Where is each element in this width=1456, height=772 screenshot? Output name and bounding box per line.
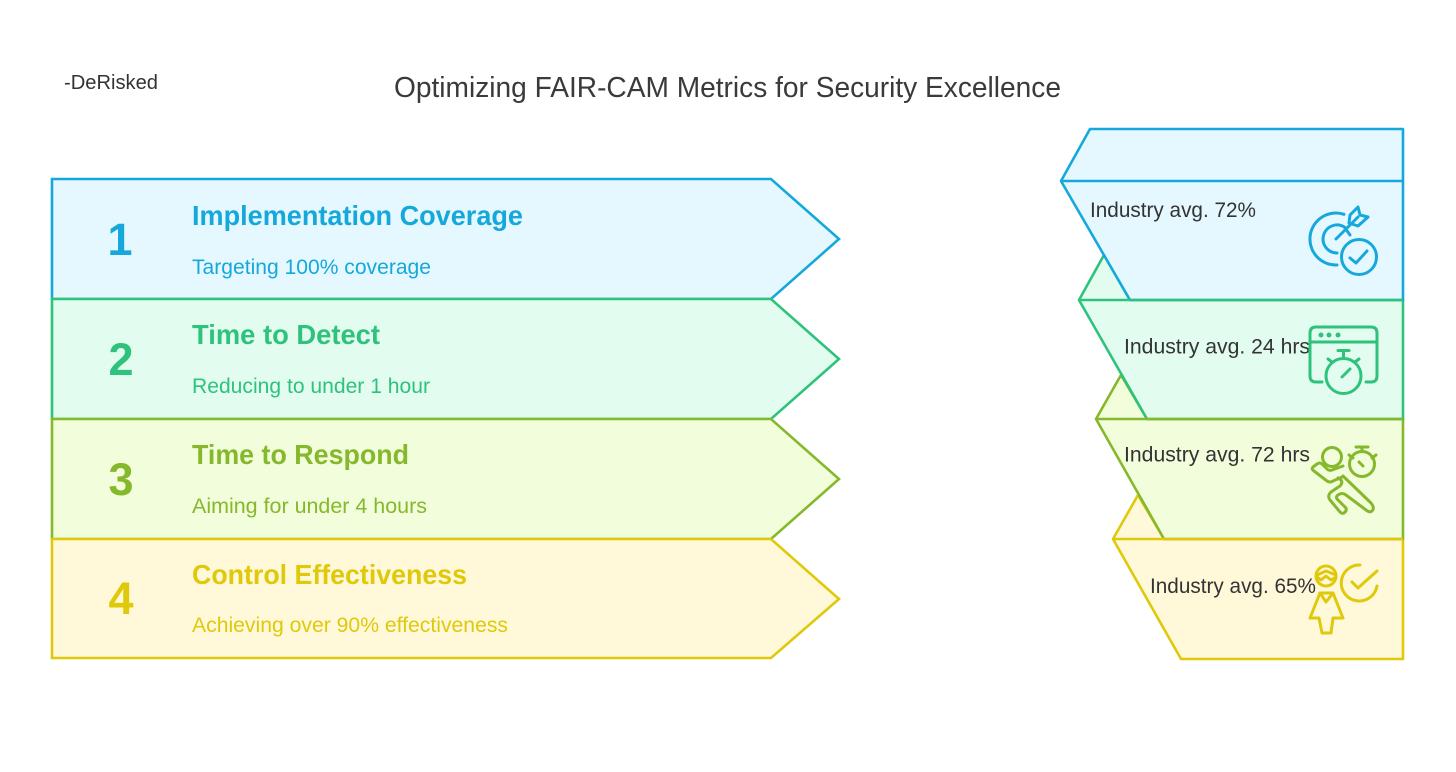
icon: target with check	[1310, 207, 1376, 274]
target text: Aiming for under 4 hours	[192, 494, 427, 518]
icon: person with check	[1310, 565, 1377, 633]
number 4: 4	[108, 573, 134, 624]
panel: industry benchmark 2	[1079, 255, 1403, 419]
target text: Reducing to under 1 hour	[192, 374, 430, 398]
panel: metric 3 time to respond arrow	[52, 419, 839, 539]
panel: industry benchmark 4	[1113, 495, 1403, 659]
benchmark text: 24 hrs: Industry avg. 24 hrs	[1124, 336, 1310, 358]
icon: runner with stopwatch	[1312, 447, 1376, 513]
number 2: 2	[108, 334, 134, 385]
number 3: 3	[108, 454, 134, 505]
panel: industry benchmark 1	[1061, 129, 1403, 300]
icon: browser window with stopwatch	[1310, 327, 1377, 394]
title: Optimizing FAIR-CAM Metrics for Security Excellence	[394, 72, 1061, 104]
target text: Achieving over 90% effectiveness	[192, 613, 508, 637]
heading: time to detect: Time to Detect	[192, 319, 380, 350]
number 1: 1	[107, 214, 133, 265]
benchmark text: 72%: Industry avg. 72%	[1090, 199, 1256, 222]
heading: control effectiveness: Control Effectiveness	[192, 559, 467, 590]
heading: implementation coverage: Implementation Coverage	[192, 200, 523, 231]
target text: Targeting 100% coverage	[192, 255, 431, 279]
benchmark text: 72 hrs: Industry avg. 72 hrs	[1124, 444, 1310, 466]
brand label: -DeRisked	[64, 71, 158, 94]
panel: metric 4 control effectiveness arrow	[52, 539, 839, 658]
panel: metric 2 time to detect arrow	[52, 299, 839, 419]
panel: metric 1 implementation coverage arrow	[52, 179, 839, 299]
panel: industry benchmark 3	[1096, 375, 1403, 539]
benchmark text: 65%: Industry avg. 65%	[1150, 575, 1316, 598]
heading: time to respond: Time to Respond	[192, 439, 409, 470]
